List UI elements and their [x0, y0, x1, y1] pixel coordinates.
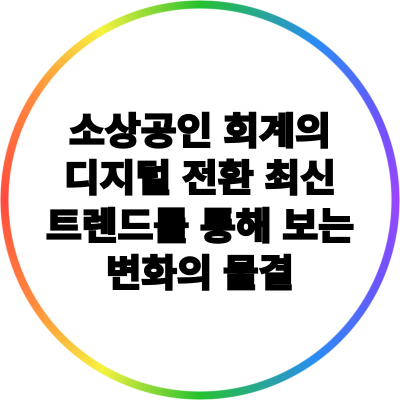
- title line 2: 디지털 전환 최신: [64, 158, 336, 199]
- title line 4: 변화의 물결: [106, 253, 294, 294]
- title line 1: 소상공인 회계의: [69, 111, 331, 152]
- title line 3: 트렌드를 통해 보는: [46, 206, 354, 247]
